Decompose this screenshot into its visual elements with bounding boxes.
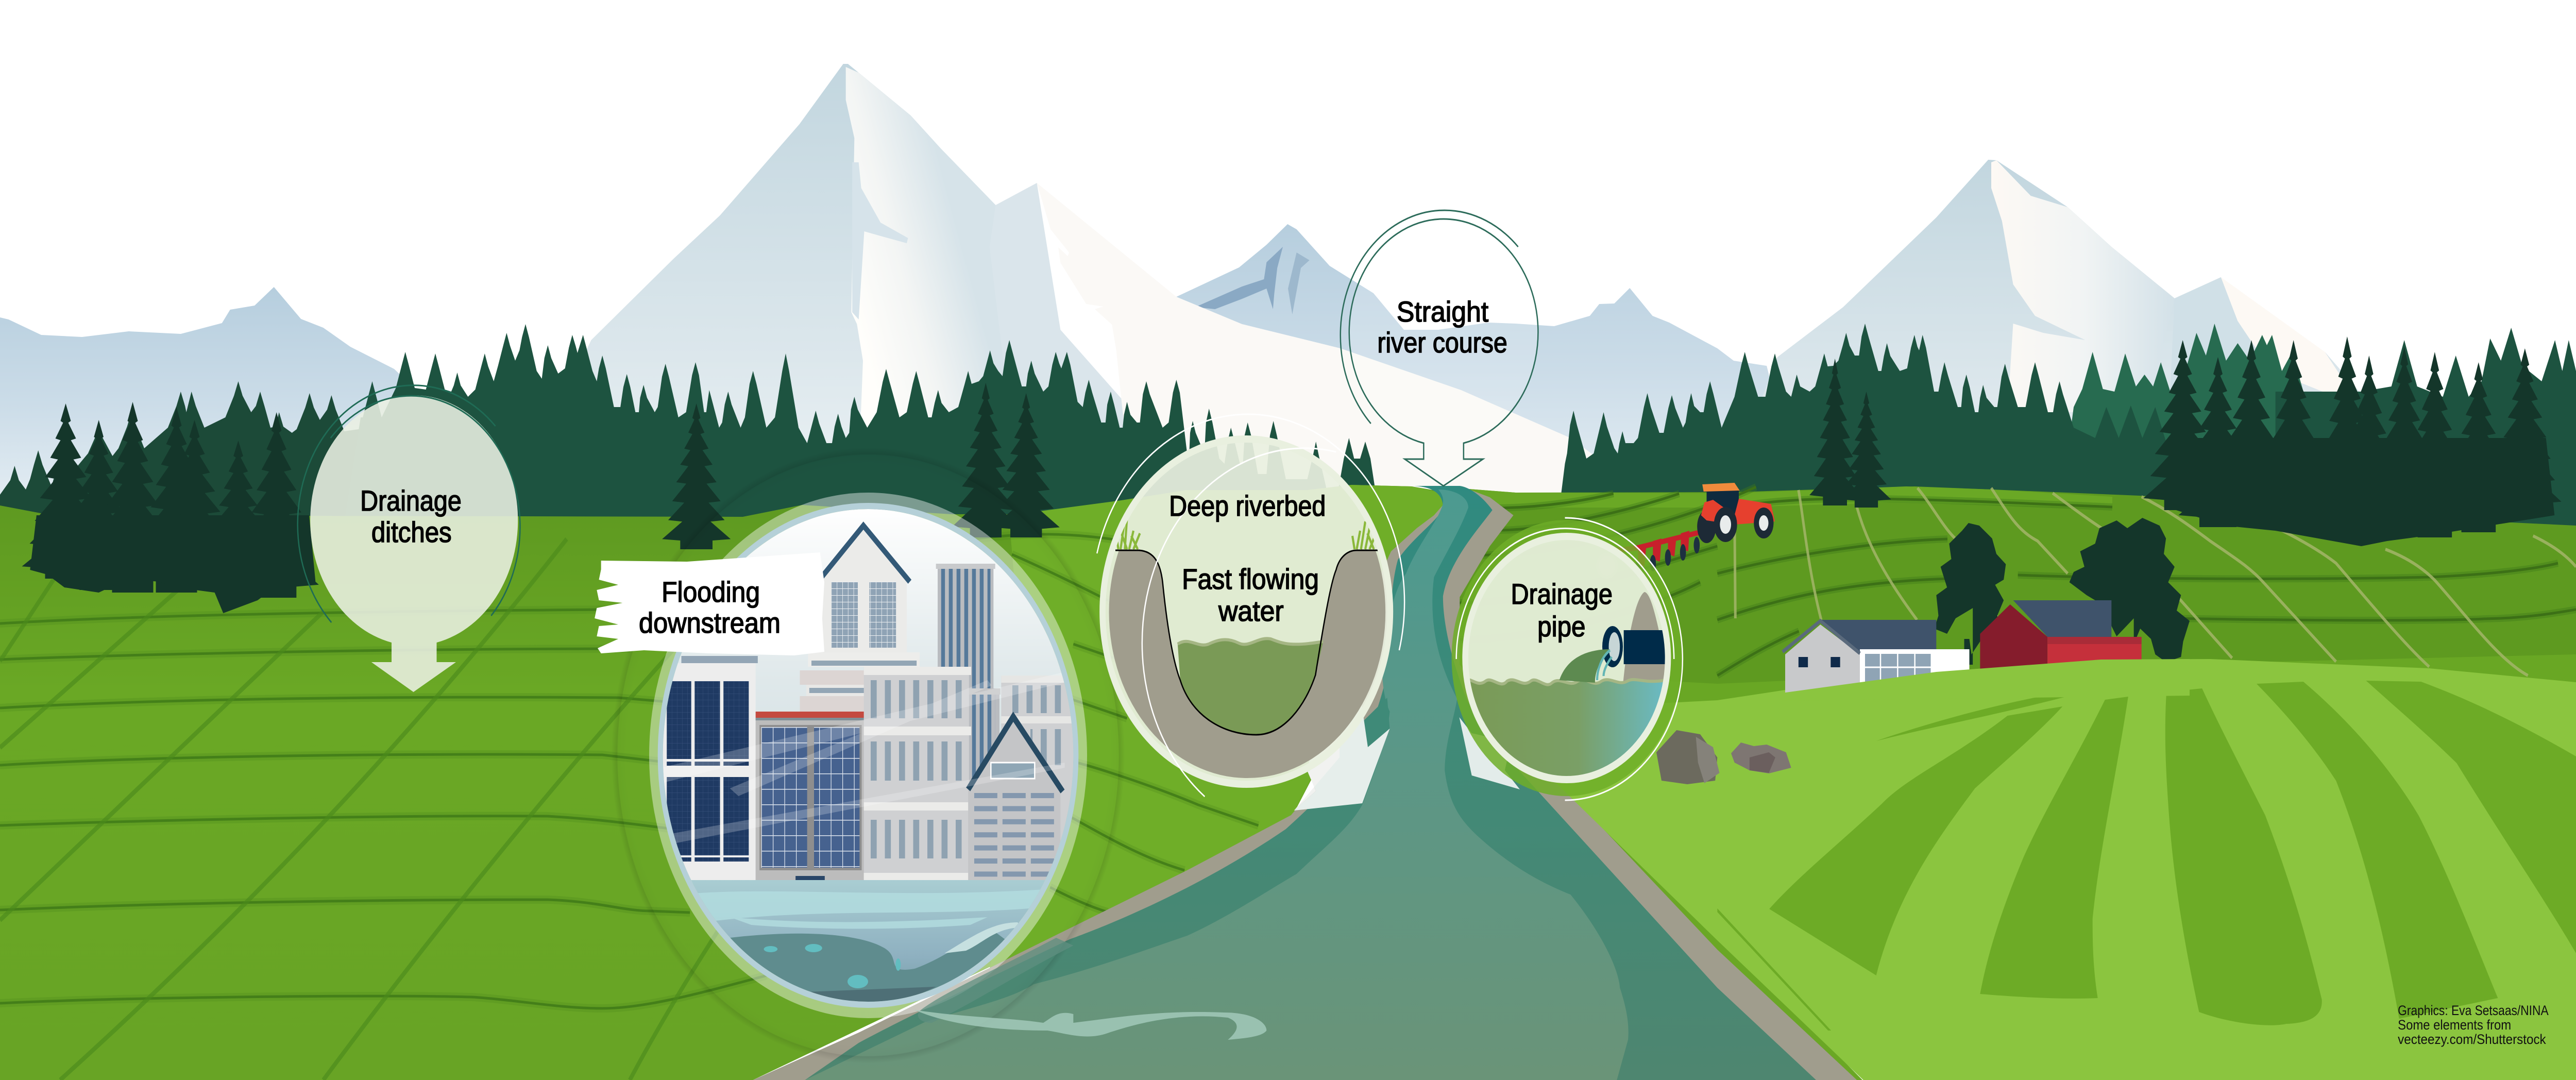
- drainage pipe circle: base: [1465, 536, 1668, 780]
- arrow: water flowing in on the right: [1459, 696, 1520, 789]
- forest: left tree line: [0, 381, 429, 526]
- river water in section: [1178, 638, 1323, 735]
- label: flooding downstream: [639, 576, 781, 639]
- straight river course callout: [1341, 210, 1538, 486]
- sky: [644, 505, 1095, 897]
- pipe mouth: [1602, 626, 1623, 667]
- river bank: left: [753, 515, 1460, 1080]
- water: [1470, 681, 1663, 776]
- farm: tree right: [2070, 518, 2190, 662]
- field: lighter lower strip on the right: [1460, 654, 2576, 794]
- plough: [1598, 531, 1702, 578]
- field: lighter centre plot by the river: [988, 485, 1451, 979]
- forest: centre tree line: [344, 324, 1376, 526]
- callout arcs: [298, 385, 520, 622]
- field: lighter top strip on the right: [1455, 486, 2112, 508]
- left white building with dark windows: [657, 656, 758, 882]
- pipe opening: [1608, 632, 1620, 661]
- cross-section of riverbed: [1099, 518, 1395, 804]
- hill: front light-green field: [1546, 659, 2576, 1080]
- flood wave spilling to the river: [918, 938, 1073, 1023]
- field: left farmland: [0, 485, 1460, 1080]
- water wave line: [1178, 638, 1323, 645]
- riverbed arcs: [1097, 414, 1404, 797]
- river: lighter main current: [805, 490, 1629, 1080]
- deep riverbed circle: base: [1100, 436, 1393, 787]
- label: straight river course: [1377, 295, 1507, 359]
- mountains: [0, 64, 2404, 520]
- credits: [2398, 1003, 2549, 1048]
- drainage ditches callout: [298, 385, 520, 692]
- drainage pipe arcs: [1456, 518, 1683, 800]
- label: drainage ditches: Drainage: [360, 484, 462, 517]
- pipe: [1624, 630, 1667, 664]
- wind and rain streaks: [667, 680, 1064, 843]
- river: [805, 486, 1816, 1080]
- hill stripes: [1717, 681, 2576, 1031]
- hill edge covering barn and house base: [1782, 659, 2190, 701]
- forest: far right band: [2276, 328, 2576, 526]
- front fir trees: left group: [22, 383, 1060, 613]
- flooding circle: halo: [612, 447, 1125, 1064]
- label: fast flowing water: Fast flowing: [1182, 563, 1319, 595]
- wave line: [1466, 679, 1670, 685]
- grass tuft left: [1116, 518, 1140, 549]
- label: drainage pipe: pipe: [1537, 610, 1586, 643]
- outflow highlight: [1597, 650, 1612, 680]
- field lines: right ditches: [1451, 487, 2576, 701]
- mountain: right peak: [1717, 160, 2404, 515]
- top house: [800, 526, 920, 712]
- label: drainage ditches: ditches: [371, 516, 452, 548]
- gravel bank: [1623, 592, 1665, 681]
- callout outline with arrow: [1349, 219, 1538, 486]
- field: right upper farmland: [1455, 486, 2576, 783]
- label: drainage pipe: Drainage: [1511, 578, 1613, 610]
- flooding circle: pale blue rim: [660, 506, 1076, 1005]
- mountain: far left range: [0, 287, 472, 520]
- flood water: [691, 880, 1045, 1002]
- panel: flooded city: [663, 509, 1074, 1002]
- label: fast flowing water: [1182, 563, 1319, 627]
- rocks: [1656, 730, 1791, 784]
- pair of firs at centre: [952, 383, 1019, 537]
- outflow: [1560, 649, 1610, 683]
- farm: tree left: [1934, 523, 2006, 665]
- tower: [936, 564, 1001, 783]
- forest: lighter back trees on the right: [2061, 324, 2318, 505]
- mountain: second peak and snow slope: [990, 183, 1674, 515]
- label: straight river course: Straight: [1397, 295, 1488, 328]
- swirl of water in the river: [914, 1010, 1266, 1040]
- dark mass under left firs: [30, 515, 316, 613]
- drainage pipe circle: green halo: [1452, 520, 1682, 796]
- riverbed gravel: [1099, 550, 1395, 804]
- forest: right tree line: [1560, 324, 2190, 505]
- farm: white house: [1783, 620, 1969, 693]
- river bank: right with green verge: [1417, 486, 1862, 1080]
- label: fast flowing water: water: [1218, 595, 1284, 627]
- farm: red barn: [1980, 600, 2142, 680]
- red roof building with blue windows: [756, 712, 866, 883]
- callout shape with arrow: [310, 395, 518, 692]
- label: flooding downstream: downstream: [639, 606, 781, 639]
- outer arc: [1341, 210, 1518, 424]
- mountain: large left peak: [506, 64, 1073, 515]
- label: drainage ditches: [360, 484, 462, 548]
- grass tuft right: [1352, 521, 1376, 549]
- single fir at centre-left: [662, 403, 731, 549]
- centre grey building: [864, 667, 971, 881]
- front fir trees: right group: [1809, 336, 2562, 546]
- tractor with plough: [1598, 483, 1775, 578]
- riverbed outline: [1115, 550, 1380, 735]
- flooding circle: translucent outer ring: [649, 493, 1087, 1018]
- mountain: back centre range: [1176, 224, 1803, 515]
- field lines: left ditches: [0, 534, 1258, 1080]
- label: drainage pipe: [1511, 578, 1613, 643]
- credits: Graphics: Eva Setsaas/NINA: [2398, 1003, 2549, 1019]
- label: flooding downstream: Flooding: [662, 576, 760, 608]
- credits: Some elements from: [2398, 1018, 2511, 1033]
- dark mass under right firs: [2168, 438, 2554, 546]
- credits: vecteezy.com/Shutterstock: [2398, 1032, 2546, 1048]
- drainage pipe circle: light rim: [1465, 536, 1668, 780]
- label: straight river course: river course: [1377, 326, 1507, 359]
- deep riverbed circle: light rim: [1103, 439, 1390, 784]
- label: deep riverbed: Deep riverbed: [1169, 490, 1326, 522]
- right building: [1001, 676, 1074, 846]
- arrow: water flowing out on the left: [1294, 618, 1390, 811]
- front house: [968, 717, 1062, 884]
- brush label background: [595, 552, 824, 655]
- drainage pipe circle: contents: [1466, 592, 1670, 783]
